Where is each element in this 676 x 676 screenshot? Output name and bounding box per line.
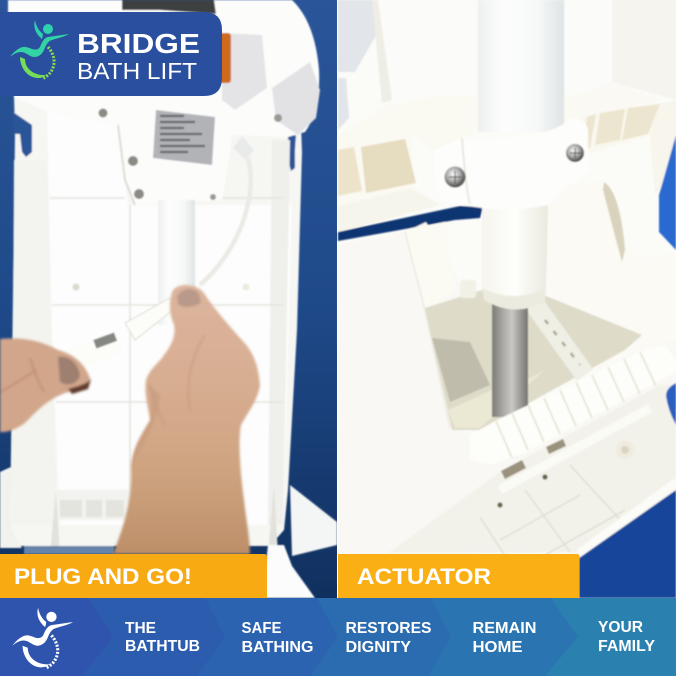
logo banner: BRIDGE xyxy=(77,28,200,59)
blue lower right xyxy=(579,490,676,598)
left shelf with cells xyxy=(338,103,412,206)
panel: actuator photo xyxy=(337,0,676,598)
rating plate xyxy=(153,110,215,165)
benefit: restores dignity xyxy=(346,620,432,656)
chevron dividers xyxy=(0,598,113,676)
panel: plug and go photo xyxy=(0,0,337,598)
clamp xyxy=(434,118,589,209)
lower left seat xyxy=(338,222,676,560)
actuator column xyxy=(158,200,195,325)
connector plug xyxy=(125,298,178,340)
benefit: safe bathing: SAFE xyxy=(242,620,282,637)
upper tube xyxy=(478,0,564,132)
rear white cylinder xyxy=(545,180,676,400)
label: actuator: ACTUATOR xyxy=(357,564,491,589)
tray ribs xyxy=(50,198,283,402)
benefit: your family xyxy=(598,619,656,655)
blue right xyxy=(659,135,676,250)
benefit: remain home: REMAIN xyxy=(472,620,536,637)
screws xyxy=(128,156,138,166)
footer benefits band xyxy=(0,598,676,676)
label: plug and go: PLUG AND GO! xyxy=(14,564,192,589)
benefit: safe bathing xyxy=(242,620,314,656)
lower right fin xyxy=(290,485,337,556)
benefit: restores dignity: RESTORES xyxy=(346,620,432,637)
orange indicator xyxy=(218,33,231,83)
benefit: your family: YOUR xyxy=(598,619,643,636)
upper back panel xyxy=(380,0,620,100)
lift tray xyxy=(10,97,302,546)
blue gap xyxy=(338,206,483,241)
screws xyxy=(444,166,466,188)
tray notches xyxy=(13,112,32,157)
icon: white logo xyxy=(12,608,73,668)
label: plug and go xyxy=(0,554,267,598)
small lug xyxy=(460,280,476,298)
grey facet xyxy=(338,0,378,130)
benefit: restores dignity: DIGNITY xyxy=(346,639,412,656)
ribbed handle xyxy=(470,345,676,465)
benefit: remain home: HOME xyxy=(472,639,522,656)
benefit: the bathtub: THE xyxy=(125,620,156,637)
lift head housing xyxy=(8,0,319,205)
right hand xyxy=(113,285,260,554)
label: actuator xyxy=(338,554,580,598)
benefit: the bathtub xyxy=(125,620,200,655)
base grid xyxy=(388,385,676,553)
dark display strip xyxy=(122,0,216,14)
steel rod xyxy=(492,295,528,417)
benefit: your family: FAMILY xyxy=(598,638,656,655)
icon: bridge bath lift logo xyxy=(10,20,69,79)
grey facets on head xyxy=(222,33,267,110)
logo banner: BATH LIFT xyxy=(77,58,197,84)
benefit: safe bathing: BATHING xyxy=(242,639,314,656)
benefit: remain home xyxy=(472,620,536,656)
lower left base xyxy=(0,466,22,548)
logo banner xyxy=(0,12,222,96)
left hand xyxy=(0,338,90,432)
benefit: the bathtub: BATHTUB xyxy=(125,638,200,655)
tray inner panel xyxy=(47,112,292,525)
right shelf with cells xyxy=(565,82,662,118)
cable xyxy=(200,158,251,285)
clamp shelf xyxy=(385,95,478,150)
rod collar xyxy=(482,285,546,310)
recess into lift xyxy=(425,290,642,430)
lower tube xyxy=(482,205,548,296)
tray bottom ribs xyxy=(58,490,130,520)
